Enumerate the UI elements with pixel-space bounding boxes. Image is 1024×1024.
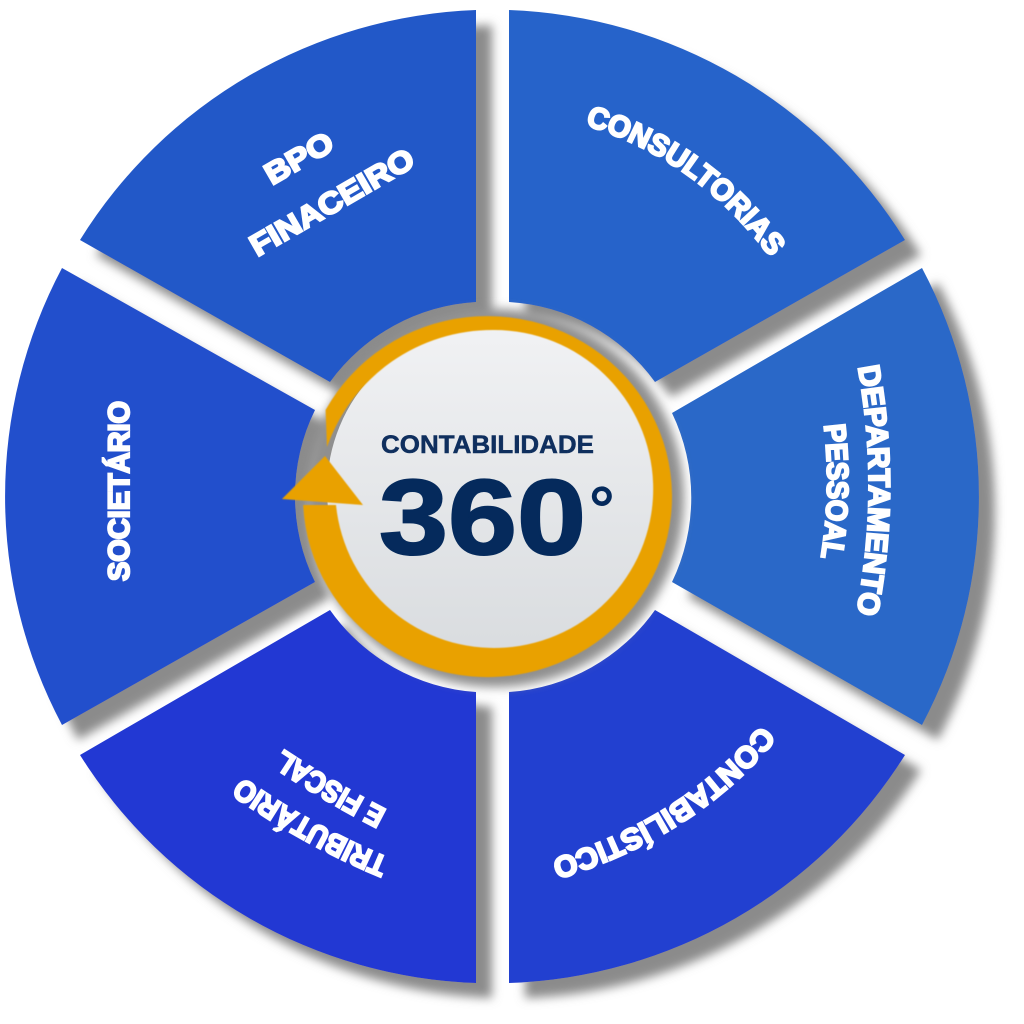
- heading: Departamento Pessoal: PESSOAL: [820, 424, 850, 558]
- heading: Tributario e Fiscal: E FISCAL: [280, 748, 387, 829]
- heading: Tributario e Fiscal: TRIBUTÁRIO: [234, 780, 384, 878]
- heading: Consultorias: CONSULTORIAS: [588, 106, 785, 256]
- panel: departamento pessoal: [672, 268, 979, 725]
- panel: bpo financeiro: [80, 10, 476, 382]
- heading: BPO Finaceiro: FINACEIRO: [244, 142, 420, 263]
- heading: Contabilistico: CONTABILÍSTICO: [554, 728, 774, 878]
- degree symbol: °: [589, 473, 615, 545]
- heading: Departamento Pessoal: [820, 364, 891, 616]
- panel: contabilistico: [509, 610, 905, 983]
- panel: tributario e fiscal: [80, 610, 476, 983]
- heading: Societario: SOCIETÁRIO: [102, 401, 130, 582]
- title: contabilidade: CONTABILIDADE: [381, 431, 594, 459]
- panel: consultorias: [509, 10, 905, 382]
- icon: circular arrow: [282, 316, 672, 677]
- white disc: [327, 323, 661, 657]
- title: 360: 360: [379, 457, 586, 577]
- center emblem: [282, 309, 684, 687]
- heading: Departamento Pessoal: DEPARTAMENTO: [857, 364, 891, 616]
- panel: societario: [5, 268, 315, 725]
- disc halo: [306, 309, 684, 687]
- heading: BPO Finaceiro: BPO: [259, 126, 340, 192]
